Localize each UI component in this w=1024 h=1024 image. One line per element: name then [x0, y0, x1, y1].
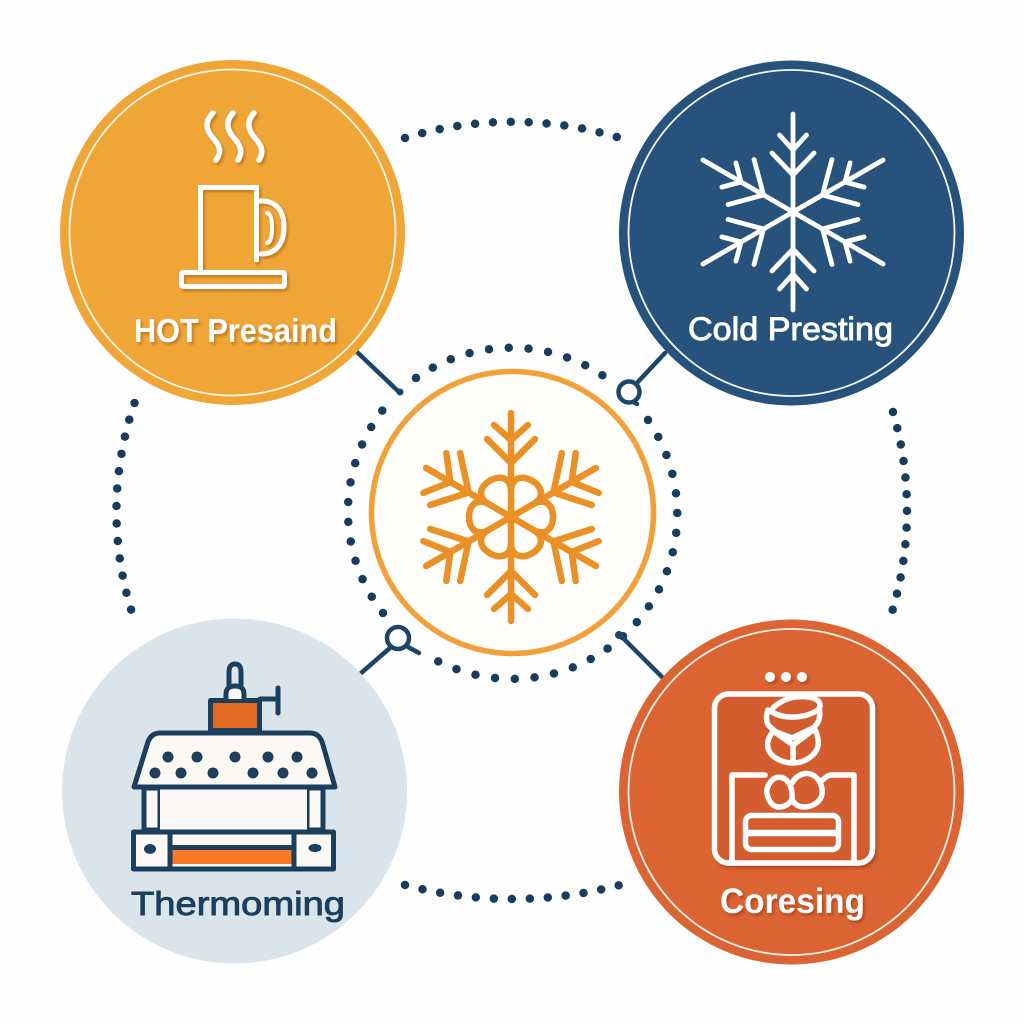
icon: white snowflake [690, 114, 896, 310]
icon: orange snowflake [411, 413, 611, 621]
icon: steaming mug [182, 113, 284, 286]
icon: thermoforming press [134, 664, 335, 869]
panel: thermoforming [62, 618, 407, 964]
centre circle [372, 372, 654, 654]
inner dotted ring [348, 348, 677, 679]
icon: core press [714, 672, 872, 863]
connector: thermoforming to centre [360, 627, 419, 674]
connector: hot to centre [357, 352, 404, 396]
label: Thermoming: Thermoming [131, 885, 345, 922]
connector: coresing to centre [615, 631, 662, 677]
panel: hot pressing [60, 60, 405, 405]
label: HOT Presaind: HOT Presaind [134, 312, 337, 349]
panel: coresing [619, 620, 964, 964]
outer dotted ring [116, 122, 907, 899]
label: Cold Presting: Cold Presting [688, 311, 893, 347]
connector: cold to centre [618, 353, 665, 404]
panel: cold pressing [619, 60, 964, 406]
label: Coresing: Coresing [720, 882, 865, 921]
